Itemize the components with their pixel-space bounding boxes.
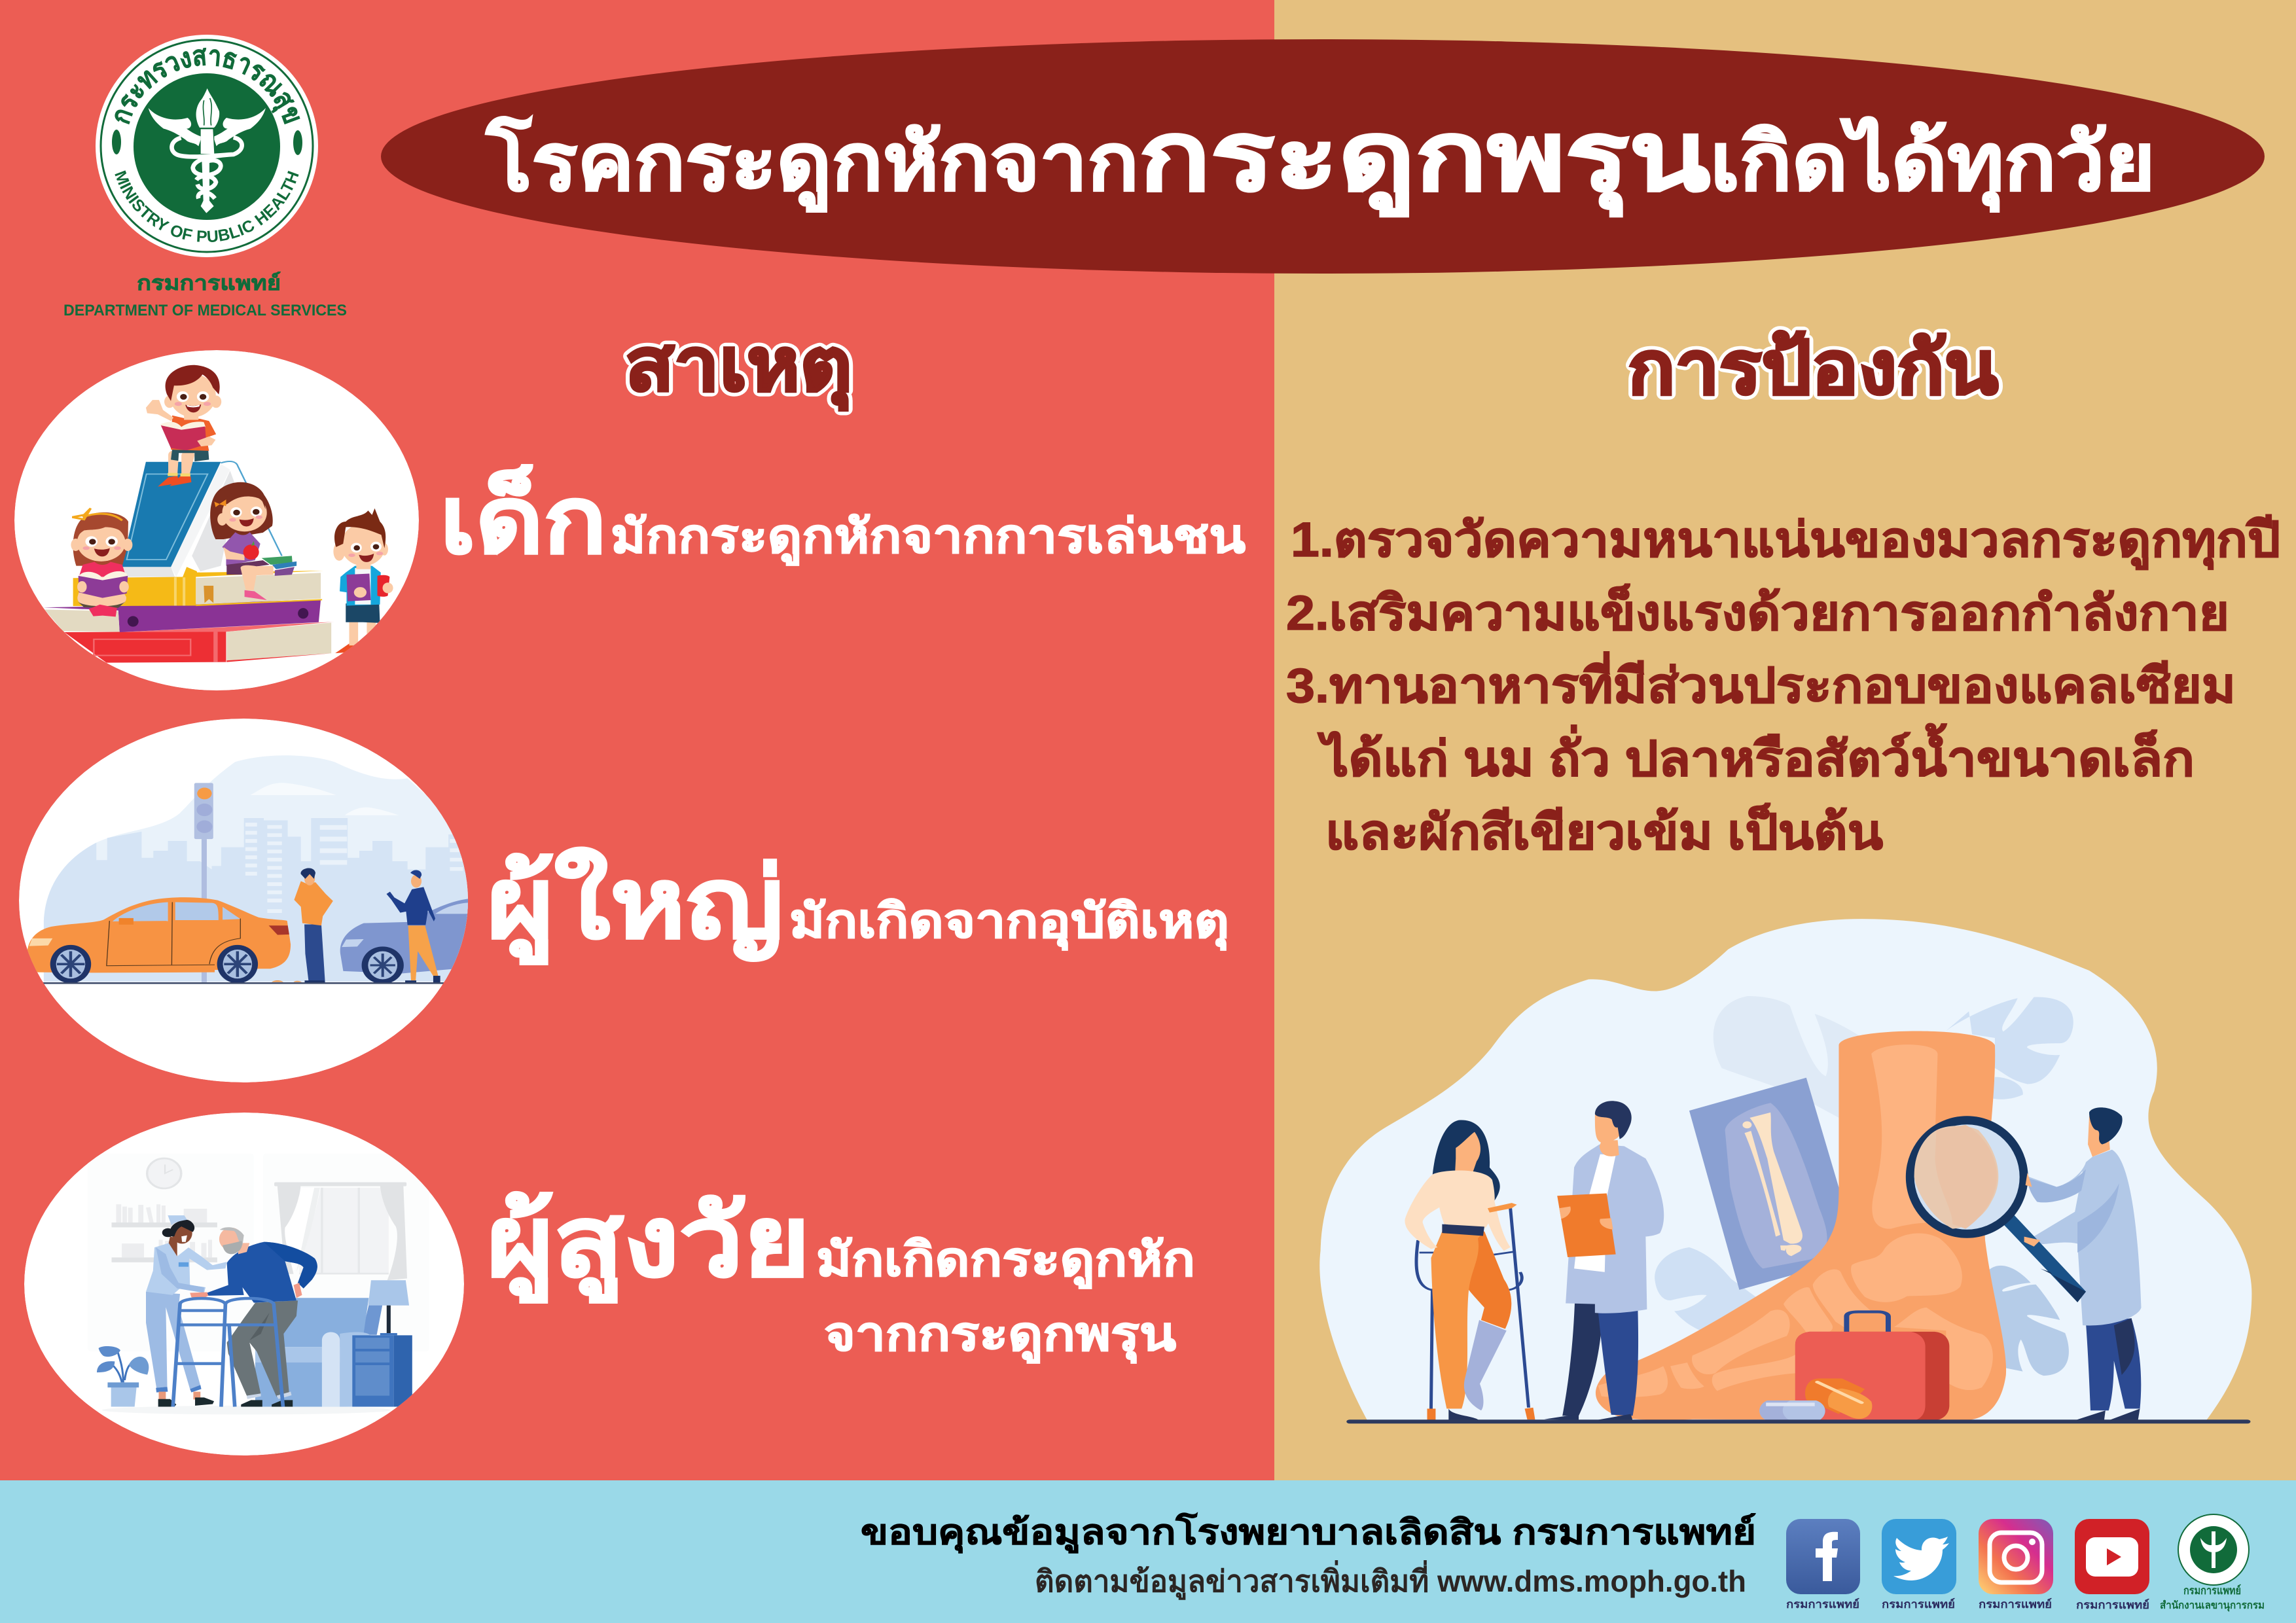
icon: facebook (1786, 1519, 1860, 1611)
text: adults cause: มักเกิดจากอุบัติเหตุ (789, 895, 1229, 951)
illustration: car accident (19, 719, 472, 1082)
icon: department logo: กรมการแพทย์ (2183, 1584, 2241, 1597)
text: elderly cause: ผู้สูงวัย (487, 1186, 810, 1303)
text: children cause (440, 464, 1246, 573)
bandage (1805, 1378, 1872, 1419)
sky and clouds (96, 755, 468, 982)
blue book tent (122, 461, 282, 577)
icon: facebook: กรมการแพทย์ (1786, 1597, 1859, 1611)
title banner: โรคกระดูกหักจาก (486, 116, 1139, 212)
icon: instagram (1979, 1519, 2053, 1611)
city skyline (44, 818, 472, 982)
icon: department logo (2160, 1514, 2265, 1612)
heading: prevention: การป้องกัน (1628, 327, 1998, 409)
panel: prevention background (1274, 0, 2296, 1480)
icon: department logo: สำนักงานเลขานุการกรม (2160, 1599, 2265, 1612)
title banner: กระดูกพรุน (1139, 103, 1710, 217)
heading: prevention: การป้องกัน (1628, 327, 1998, 409)
illustration: elderly with walker (24, 1113, 464, 1455)
footer text: ขอบคุณข้อมูลจากโรงพยาบาลเลิดสิน กรมการแพทย์ (861, 1512, 1756, 1554)
red book (64, 622, 334, 663)
blue car (340, 899, 469, 984)
logo: Ministry of Public Health: กระทรวงสาธารณสุข (115, 47, 300, 124)
text: elderly cause (487, 1186, 1195, 1364)
prevention list: 1.ตรวจวัดความหนาแน่นของมวลกระดูกทุกปี (1291, 512, 2280, 570)
text: adults cause (487, 847, 1229, 965)
heading: causes: สาเหตุ (625, 324, 852, 411)
magnifying glass (1906, 1116, 2086, 1302)
prevention list: 3.ทานอาหารที่มีส่วนประกอบของแคลเซียม (1286, 651, 2236, 713)
leaves (1655, 996, 2073, 1376)
illustration: children on books (14, 350, 419, 690)
panel: footer background (0, 1480, 2296, 1623)
logo: Ministry of Public Health: MINISTRY OF PUBLIC HEALTH (115, 170, 298, 242)
text: children cause: เด็ก (440, 464, 607, 573)
lamp (368, 1280, 409, 1334)
prevention list: และผักสีเขียวเข้ม เป็นต้น (1325, 804, 1883, 859)
bedside cabinet (352, 1333, 412, 1407)
road line (43, 980, 444, 984)
first aid case (1795, 1311, 1949, 1420)
kid on top of books (146, 365, 221, 487)
traffic light (194, 783, 213, 982)
logo caption: department name (63, 272, 347, 319)
icon: twitter (1882, 1519, 1956, 1611)
x-ray sheet (1689, 1078, 1840, 1290)
text: children cause: มักกระดูกหักจากการเล่นชน (611, 510, 1246, 566)
foot (1596, 1031, 2006, 1420)
woman on crutches (1405, 1120, 1535, 1420)
orange car (27, 897, 291, 983)
walker (173, 1298, 283, 1407)
panel: causes background (0, 0, 1274, 1480)
ground line (1346, 1419, 2250, 1423)
background blob (1319, 919, 2251, 1420)
prevention list: 2.เสริมความแข็งแรงด้วยการออกกำลังกาย (1286, 584, 2229, 640)
title banner: เกิดได้ทุกวัย (1710, 117, 2155, 212)
footer text: ติดตามข้อมูลข่าวสารเพิ่มเติมที่ www.dms.moph.go.th (1035, 1560, 1746, 1600)
girl sitting left (71, 508, 132, 616)
yellow book (73, 567, 323, 606)
text: adults cause: ผู้ใหญ่ (487, 847, 783, 965)
purple book (43, 599, 321, 632)
logo caption: department name: กรมการแพทย์ (137, 272, 281, 294)
room background (88, 1154, 429, 1351)
ointment (1759, 1400, 1825, 1420)
elderly man (190, 1227, 317, 1407)
nurse (146, 1215, 227, 1407)
potted plant (97, 1346, 149, 1407)
window and curtains (274, 1182, 407, 1280)
icon: twitter: กรมการแพทย์ (1882, 1597, 1955, 1611)
icon: youtube (2075, 1519, 2149, 1611)
icon: instagram: กรมการแพทย์ (1979, 1597, 2052, 1611)
logo caption: department name: DEPARTMENT OF MEDICAL SERVICES (63, 302, 347, 319)
heading: causes: สาเหตุ (625, 324, 852, 411)
text: elderly cause: มักเกิดกระดูกหัก (816, 1234, 1195, 1289)
doctor with magnifier (2028, 1107, 2141, 1420)
prevention list (1286, 512, 2280, 859)
man hand on head (294, 868, 333, 984)
icon: youtube: กรมการแพทย์ (2076, 1598, 2149, 1611)
man with phone (386, 870, 440, 983)
title banner (381, 39, 2265, 274)
floor shadow (102, 1406, 391, 1414)
boy standing right (333, 508, 393, 653)
text: elderly cause: จากกระดูกพรุน (824, 1308, 1176, 1364)
logo: Ministry of Public Health (96, 35, 318, 257)
doctor with clipboard (1544, 1101, 1664, 1420)
illustration: foot bone examination (1319, 919, 2251, 1423)
footer text (861, 1512, 1756, 1600)
prevention list: ได้แก่ นม ถั่ว ปลาหรือสัตว์น้ำขนาดเล็ก (1317, 723, 2195, 786)
sofa (255, 1298, 382, 1407)
girl sitting middle (210, 482, 296, 600)
